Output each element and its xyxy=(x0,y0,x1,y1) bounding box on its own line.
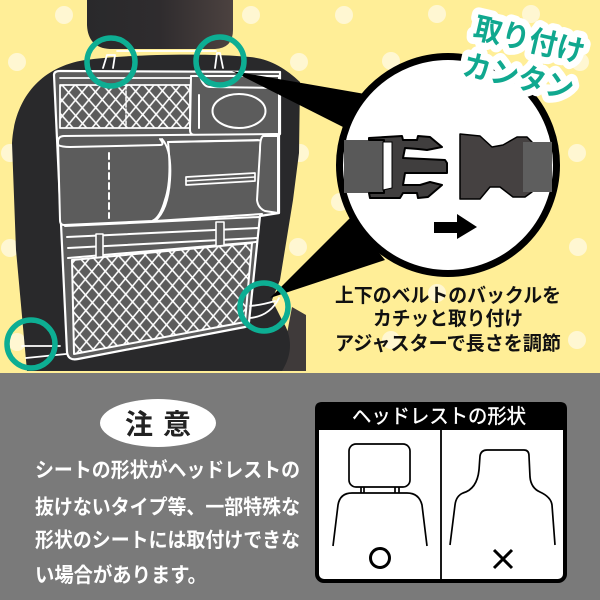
headrest straps xyxy=(103,51,223,68)
left buckle half xyxy=(369,136,447,198)
lower strap right xyxy=(250,298,279,318)
badge: easy installation: 取り付け xyxy=(470,12,588,70)
lower mesh pocket xyxy=(72,243,252,354)
panel title: ヘッドレストの形状 xyxy=(352,405,526,428)
instruction text: カチッと取り付け xyxy=(373,308,523,330)
upper mesh pocket xyxy=(60,78,190,128)
caution text: 抜けないタイプ等、一部特殊な xyxy=(35,496,300,519)
straps across pouch xyxy=(65,217,259,262)
instruction text: 上下のベルトのバックルを xyxy=(335,285,561,307)
callout wedges to magnifier xyxy=(232,71,385,298)
caution text xyxy=(35,458,300,587)
caution label xyxy=(100,399,216,447)
panel: yellow upper background xyxy=(0,0,600,373)
circle mark xyxy=(370,548,390,568)
caution text: い場合があります。 xyxy=(35,563,207,587)
lower strap left xyxy=(22,346,66,358)
badge: easy installation: カンタン xyxy=(459,49,577,107)
badge: easy installation xyxy=(459,12,588,107)
magnifier circle xyxy=(340,56,556,274)
divider xyxy=(440,430,442,580)
arrow pointing right xyxy=(434,214,477,239)
seat with integrated headrest xyxy=(450,450,555,545)
instruction text: アジャスターで長さを調節 xyxy=(335,333,561,355)
cross mark xyxy=(494,550,512,568)
buckle illustration xyxy=(344,134,552,199)
right buckle half with belt xyxy=(460,134,552,199)
seat back organizer xyxy=(22,51,280,359)
middle pouch with pen slot xyxy=(58,134,277,225)
caution label: 注 意 xyxy=(125,409,191,440)
left belt xyxy=(344,140,384,193)
side pocket xyxy=(257,136,278,213)
caution text: 形状のシートには取付けできな xyxy=(35,529,300,552)
teal highlight circles xyxy=(7,37,288,368)
panel header xyxy=(315,402,567,430)
seat with removable headrest xyxy=(333,444,427,546)
tray with cup holder xyxy=(190,76,279,135)
caution text: シートの形状がヘッドレストの xyxy=(35,458,300,482)
panel: headrest shape comparison xyxy=(315,402,567,581)
panel: grey lower background xyxy=(0,373,600,600)
car seat silhouette xyxy=(12,0,306,371)
instruction text xyxy=(335,285,561,355)
